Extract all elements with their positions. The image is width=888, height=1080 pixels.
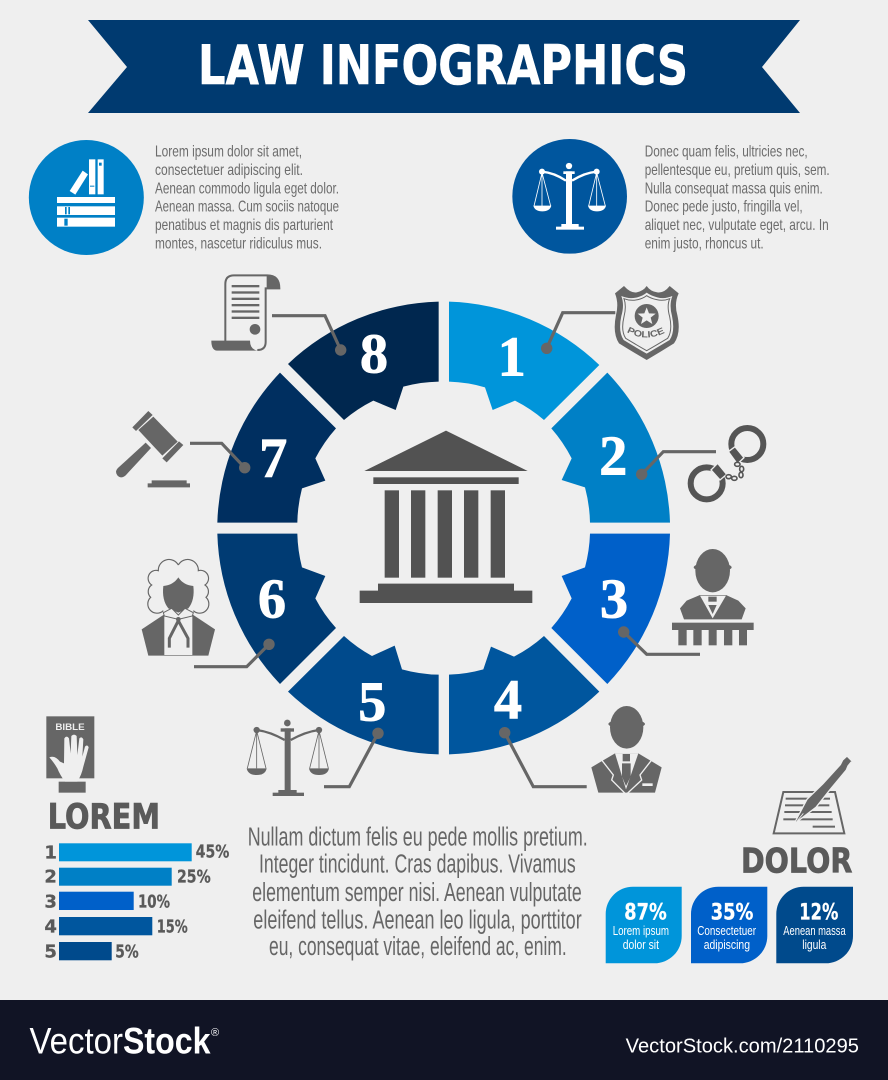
connector 1 (541, 313, 615, 354)
text block: right intro: Nulla consequat massa quis enim. (645, 180, 823, 197)
bar percentages: 5% (115, 941, 139, 962)
stat card: 35%: Consectetuer (697, 923, 757, 938)
bar row labels: 4 (44, 917, 57, 938)
text block: centre paragraph (248, 824, 588, 961)
icon: judge with wig (142, 559, 215, 656)
icon: scales of justice in blue circle (512, 139, 627, 254)
icon: hand on bible (46, 716, 94, 793)
segment 7 (217, 373, 336, 523)
heading: DOLOR: DOLOR (741, 842, 852, 882)
connector 7 (190, 443, 250, 473)
footer logo: Vector (30, 1020, 123, 1061)
icon: police badge: POLICE (627, 326, 664, 338)
text block: left intro: Lorem ipsum dolor sit amet, (155, 144, 302, 160)
stat card: 12%: ligula (802, 937, 827, 952)
footer id: VectorStock.com/2110295 (626, 1036, 859, 1058)
connector 6 (194, 639, 275, 667)
stat card: 12% (776, 887, 853, 963)
icon: pen and paper (774, 756, 852, 833)
icon: defendant at bar (672, 549, 754, 645)
segment numbers: 2 (599, 425, 627, 487)
text block: centre paragraph: eu, consequat vitae, eleifend ac, enim. (269, 933, 567, 961)
stat card: 35%: 35% (711, 900, 753, 925)
footer logo: ® (211, 1027, 219, 1039)
text block: left intro: montes, nascetur ridiculus mus. (155, 235, 322, 252)
connector 8 (272, 316, 346, 356)
icon: handcuffs (691, 428, 763, 499)
stat card: 87%: 87% (624, 900, 667, 925)
segment numbers (258, 324, 628, 734)
text block: right intro: enim justo, rhoncus ut. (645, 235, 764, 252)
segmented ring chart (217, 302, 670, 754)
text block: right intro (645, 144, 830, 252)
connector 5 (324, 728, 384, 787)
bar percentages: 10% (138, 891, 170, 912)
segment 8 (288, 302, 439, 420)
stat card: 35% (691, 887, 767, 963)
bar percentages: 15% (157, 916, 188, 937)
text block: left intro (155, 144, 339, 252)
text block: left intro: Aenean commodo ligula eget dolor. (155, 180, 339, 197)
text block: centre paragraph: eleifend tellus. Aenean leo ligula, porttitor (253, 906, 582, 934)
bar row labels: 3 (44, 892, 57, 913)
segment numbers: 5 (358, 672, 386, 734)
stat card: 35%: adipiscing (704, 937, 750, 952)
icon: scroll document (211, 275, 279, 351)
bar percentages (115, 842, 229, 962)
footer bar (0, 1000, 888, 1080)
bar chart (44, 842, 229, 963)
text block: centre paragraph: elementum semper nisi. Aenean vulputate (252, 879, 582, 907)
stat card: 12%: Aenean massa (783, 923, 846, 938)
bar row labels: 5 (44, 942, 57, 963)
title banner (88, 20, 800, 113)
icon: police badge (614, 286, 679, 360)
icon: courthouse (360, 431, 532, 603)
text block: right intro: aliquet nec, vulputate eget, arcu. In (645, 217, 829, 234)
text block: centre paragraph: Nullam dictum felis eu pede mollis pretium. (248, 824, 588, 852)
footer logo: Stock (123, 1020, 211, 1061)
bar percentages: 45% (196, 842, 229, 863)
stat card: 87%: dolor sit (623, 937, 659, 952)
text block: right intro: Donec pede justo, fringilla vel, (645, 198, 803, 216)
segment 6 (217, 534, 336, 684)
text block: right intro: Donec quam felis, ultricies nec, (645, 144, 808, 160)
segment numbers: 3 (600, 568, 628, 630)
icon: hand on bible: BIBLE (55, 722, 85, 732)
segment 4 (449, 636, 599, 754)
segment numbers: 6 (258, 568, 286, 630)
connector 4 (499, 727, 587, 787)
title banner: LAW INFOGRAPHICS (198, 34, 688, 97)
stat card: 12%: 12% (799, 900, 838, 925)
icon: small scales (247, 720, 329, 796)
text block: centre paragraph: Integer tincidunt. Cras dapibus. Vivamus (259, 850, 576, 878)
connector 2 (636, 452, 716, 480)
stat card: 87%: Lorem ipsum (613, 923, 669, 938)
segment numbers: 1 (498, 327, 526, 389)
icon: lawyer in suit (591, 706, 662, 793)
segment numbers: 7 (259, 428, 287, 490)
bar row labels: 2 (44, 867, 57, 888)
bar row labels: 1 (44, 843, 57, 864)
text block: left intro: penatibus et magnis dis parturient (155, 217, 333, 234)
stat card: 87% (606, 887, 682, 963)
connector lines (190, 313, 716, 787)
bar row labels (44, 843, 57, 963)
text block: left intro: consectetuer adipiscing elit. (155, 162, 303, 179)
connector 3 (618, 626, 700, 654)
segment 3 (551, 534, 670, 684)
segment numbers: 8 (360, 324, 388, 386)
footer logo (30, 1020, 219, 1061)
segment 1 (449, 302, 599, 420)
icon: books in blue circle (29, 140, 144, 255)
segment 2 (551, 373, 670, 523)
segment 5 (288, 636, 439, 754)
bar percentages: 25% (177, 866, 211, 887)
icon: gavel (116, 411, 190, 487)
text block: left intro: Aenean massa. Cum sociis natoque (155, 198, 339, 216)
heading: LOREM: LOREM (48, 798, 160, 838)
segment numbers: 4 (494, 669, 522, 731)
